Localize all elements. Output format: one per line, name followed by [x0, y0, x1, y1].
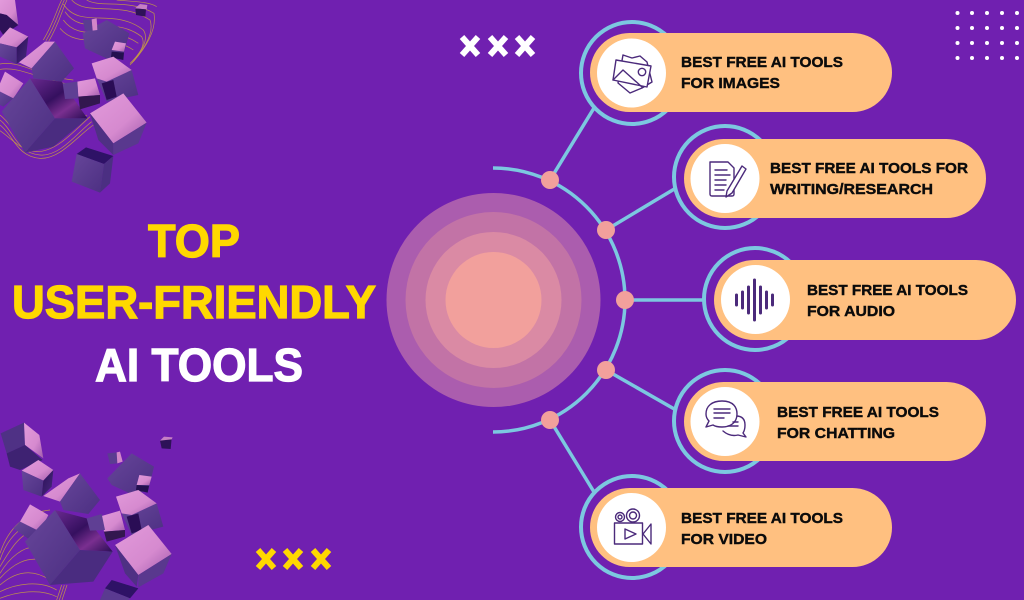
- dot grid: [956, 11, 1019, 60]
- card: audio: [704, 248, 1016, 350]
- decoration: bottom-left gold waves and cubes: [0, 423, 173, 600]
- icon: document and pen: [710, 162, 746, 197]
- icon: video camera: [614, 509, 651, 544]
- icon: images: [613, 55, 652, 93]
- card: images: BEST FREE AI TOOLS: [681, 54, 843, 71]
- concentric centre circles: [386, 193, 600, 407]
- white cross marks: [462, 37, 533, 55]
- card: images: FOR IMAGES: [681, 75, 780, 92]
- title: USER-FRIENDLY: [12, 276, 376, 328]
- title: [12, 215, 376, 391]
- connectors: arc and branch lines: [493, 108, 705, 492]
- card: video: [581, 476, 892, 578]
- card: audio: BEST FREE AI TOOLS: [807, 282, 968, 299]
- yellow cross marks: [258, 550, 329, 568]
- card: writing and research: [674, 126, 986, 228]
- icon: sound wave: [736, 280, 772, 320]
- card: video: FOR VIDEO: [681, 531, 767, 548]
- card: writing and research: BEST FREE AI TOOLS FOR: [770, 160, 968, 177]
- title: TOP: [148, 215, 240, 267]
- card: chatting: [674, 370, 986, 472]
- card: writing and research: WRITING/RESEARCH: [770, 181, 933, 198]
- card: chatting: FOR CHATTING: [777, 425, 895, 442]
- card: chatting: BEST FREE AI TOOLS: [777, 404, 939, 421]
- card: video: BEST FREE AI TOOLS: [681, 510, 843, 527]
- title: AI TOOLS: [95, 339, 303, 391]
- icon: chat bubbles: [706, 401, 746, 437]
- connector nodes: [541, 171, 634, 429]
- card: audio: FOR AUDIO: [807, 303, 895, 320]
- card: images: [581, 22, 892, 124]
- decoration: top-left gold waves and cubes: [0, 0, 157, 193]
